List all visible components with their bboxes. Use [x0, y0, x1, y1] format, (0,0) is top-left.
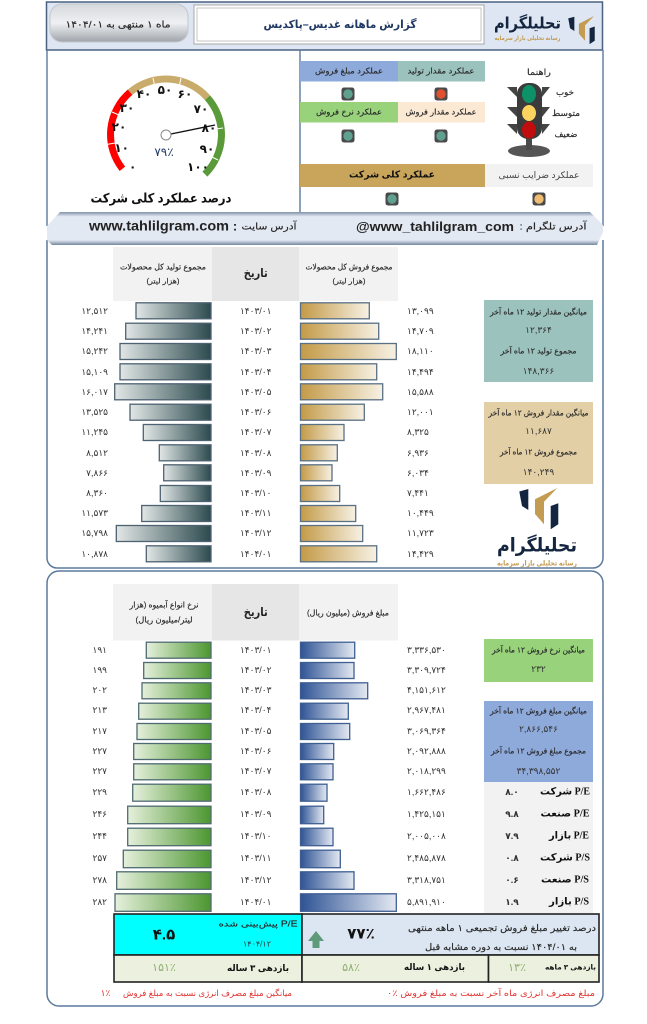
production values: ۱۵,۱۰۹ — [81, 367, 108, 377]
bar chart: total production — [115, 303, 211, 562]
forward P/E cell — [114, 914, 302, 955]
stat box: sales amount averages: ۲,۸۶۶,۵۴۶ — [519, 724, 558, 734]
sales change cell: درصد تغییر مبلغ فروش تجمیعی ۱ ماهه منتهی — [408, 923, 596, 933]
address bar: آدرس سایت — [242, 220, 297, 232]
production values: ۱۲,۵۱۲ — [81, 306, 108, 316]
energy cost value: average: ۱٪ — [101, 988, 110, 998]
production values: ۱۴,۲۴۱ — [81, 326, 108, 336]
valuation ratios table: P/E صنعت — [540, 808, 590, 820]
sales amount values: ۲,۰۹۲,۸۸۸ — [407, 746, 446, 756]
table 2 dates: ۱۴۰۴/۰۱ — [240, 897, 271, 907]
gauge: overall company performance: ۲۰ — [112, 120, 126, 134]
panel: report header — [46, 2, 602, 50]
price values — [92, 645, 107, 907]
indicator: sales price performance: عملکرد نرخ فروش — [316, 108, 382, 116]
logo: Tahlilgram — [497, 488, 577, 568]
production values: ۱۱,۲۴۵ — [81, 427, 108, 437]
three-year return cell: ۱۵۱٪ — [152, 962, 176, 974]
gauge: overall company performance: ۵۰ — [158, 83, 172, 97]
three-year return cell: بازدهی ۳ ساله — [227, 963, 289, 974]
stat box: sales quantity averages: ۱۴۰,۲۴۹ — [523, 467, 554, 477]
stat box: production averages: مجموع تولید ۱۲ ماه آخر — [500, 346, 576, 356]
valuation ratios table: P/S بازار — [548, 896, 589, 908]
stat box: production averages: میانگین مقدار تولید ۱۲ ماه آخر — [489, 306, 587, 316]
price values: ۲۸۲ — [92, 897, 107, 907]
stat box: production averages: ۱۲,۳۶۴ — [525, 325, 552, 335]
production values: ۱۵,۷۹۸ — [81, 528, 108, 538]
sales values: ۱۳,۰۹۹ — [407, 306, 434, 316]
table 2 dates: ۱۴۰۳/۱۲ — [240, 875, 272, 885]
sales values — [407, 306, 434, 559]
panel: sales amount and price — [47, 571, 603, 1006]
indicator: sales quantity performance: عملکرد مقدار فروش — [406, 108, 476, 116]
valuation ratios table — [484, 782, 593, 913]
table 1 dates: ۱۴۰۳/۱۲ — [240, 528, 272, 538]
indicator: relative ratios performance — [485, 164, 593, 206]
gauge: overall company performance: ۴۰ — [137, 87, 151, 101]
table 2 dates: ۱۴۰۳/۰۷ — [240, 766, 272, 776]
table 1 dates: ۱۴۰۳/۰۸ — [240, 448, 272, 458]
forward P/E cell: P/E پیش‌بینی شده — [219, 920, 298, 928]
sales change cell: به ۱۴۰۴/۰۱ نسبت به دوره مشابه قبل — [425, 942, 577, 952]
table 2 dates: ۱۴۰۳/۰۳ — [240, 685, 272, 695]
address bar: www.tahlilgram.com — [88, 218, 229, 234]
stat box: sales quantity averages — [484, 402, 593, 484]
forward P/E cell: ۴.۵ — [153, 926, 175, 944]
sales values: ۶,۹۳۶ — [407, 448, 429, 458]
sales change cell — [302, 914, 599, 955]
sales values: ۱۸,۱۱۰ — [407, 346, 434, 356]
report title: گزارش ماهانه غدیس–پاکدیس — [264, 18, 417, 31]
forward P/E cell: ۱۴۰۴/۱۲ — [243, 940, 271, 948]
sales values: ۱۵,۵۸۸ — [407, 387, 434, 397]
price values: ۲۲۹ — [92, 787, 107, 797]
production values: ۸,۳۶۰ — [86, 488, 108, 498]
header logo: تحلیلگرام — [494, 14, 561, 32]
table 2 dates: ۱۴۰۳/۰۶ — [240, 746, 272, 756]
sales amount values: ۳,۳۱۸,۷۵۱ — [407, 875, 446, 885]
table 1 dates — [240, 306, 272, 559]
stat box: sales quantity averages: ۱۱,۶۸۷ — [525, 426, 552, 436]
address bar: : — [233, 218, 237, 234]
table 1 headers: مجموع تولید کل محصولات — [120, 262, 206, 272]
price values: ۲۴۶ — [92, 809, 107, 819]
legend: traffic light guide: ضعیف — [554, 129, 578, 139]
three-month return cell — [488, 955, 599, 982]
stat box: sales amount averages: میانگین مبلغ فروش ۱۲ ماه آخر — [489, 706, 587, 716]
sales amount values: ۲,۰۰۵,۰۰۸ — [407, 831, 446, 841]
price values: ۱۹۱ — [92, 645, 107, 655]
sales values: ۱۴,۴۲۹ — [407, 549, 434, 559]
table 2 headers: لیتر/میلیون ریال) — [136, 616, 192, 624]
table 1 dates: ۱۴۰۳/۱۱ — [240, 508, 271, 518]
indicator: sales amount performance — [300, 61, 398, 100]
gauge value: ۷۹٪ — [154, 145, 174, 159]
sales amount values: ۱,۶۶۲,۴۸۶ — [407, 787, 446, 797]
table 1 dates: ۱۴۰۴/۰۱ — [240, 549, 271, 559]
valuation ratios table: P/E شرکت — [540, 786, 590, 798]
table 2 dates: ۱۴۰۳/۰۹ — [240, 809, 272, 819]
three-year return cell — [114, 955, 302, 982]
table 1 headers: (هزار لیتر) — [146, 278, 180, 286]
table 2 dates: ۱۴۰۳/۰۴ — [240, 705, 272, 715]
table 1 headers — [113, 247, 398, 301]
valuation ratios table: P/S صنعت — [541, 874, 589, 886]
table 1 dates: ۱۴۰۳/۰۴ — [240, 367, 272, 377]
table 1 dates: ۱۴۰۳/۱۰ — [240, 488, 271, 498]
table 1 dates: ۱۴۰۳/۰۵ — [240, 387, 272, 397]
three-month return cell: بازدهی ۳ ماهه — [545, 964, 596, 972]
table 2 headers — [113, 584, 398, 640]
price values: ۲۷۸ — [92, 875, 107, 885]
production values: ۸,۵۱۲ — [86, 448, 108, 458]
sales values: ۱۱,۷۲۳ — [407, 528, 434, 538]
table 1 dates: ۱۴۰۳/۰۶ — [240, 407, 272, 417]
valuation ratios table: ۸.۰ — [505, 787, 519, 797]
valuation ratios table: ۹.۸ — [505, 809, 519, 819]
gauge: overall company performance: ۱۰۰ — [187, 160, 209, 174]
production values: ۱۰,۸۷۸ — [81, 549, 108, 559]
address bar — [47, 212, 603, 245]
three-month return cell: ۱۳٪ — [508, 962, 526, 974]
sales amount values: ۲,۴۸۵,۸۷۸ — [407, 853, 446, 863]
table 2 dates: ۱۴۰۳/۰۱ — [240, 645, 271, 655]
gauge: overall company performance: ۰ — [129, 160, 136, 174]
table 2 headers: نرخ انواع آبمیوه (هزار — [129, 600, 198, 610]
sales amount values — [407, 645, 446, 907]
energy cost note: average: میانگین مبلغ مصرف انرژی نسبت به مبلغ فروش — [123, 988, 292, 998]
table 1 dates: ۱۴۰۳/۰۷ — [240, 427, 272, 437]
price values: ۱۹۹ — [92, 665, 107, 675]
date pill: ماه ۱ منتهی به ۱۴۰۴/۰۱ — [66, 20, 170, 30]
valuation ratios table: ۰.۸ — [505, 853, 519, 863]
address bar: آدرس تلگرام : — [520, 220, 587, 232]
sales amount values: ۲,۹۶۷,۴۸۱ — [407, 705, 446, 715]
sales amount values: ۳,۳۳۶,۵۳۰ — [407, 645, 446, 655]
indicator: relative ratios performance: عملکرد ضرایب نسبی — [498, 170, 580, 180]
gauge title: درصد عملکرد کلی شرکت — [90, 190, 232, 206]
logo: Tahlilgram: تحلیلگرام — [497, 534, 577, 556]
sales amount values: ۴,۱۵۱,۶۱۲ — [407, 685, 446, 695]
sales values: ۸,۳۲۵ — [407, 427, 429, 437]
table 2 headers: مبلغ فروش (میلیون ریال) — [307, 608, 389, 618]
stat box: sales quantity averages: میانگین مقدار فروش ۱۲ ماه آخر — [488, 408, 588, 418]
one-year return cell — [302, 955, 488, 982]
price values: ۲۱۳ — [92, 705, 107, 715]
stat box: production averages — [484, 300, 593, 382]
icon: up arrow — [308, 931, 324, 948]
price values: ۲۱۷ — [92, 726, 107, 736]
stat box: average sales price: میانگین نرخ فروش ۱۲ ماه آخر — [491, 644, 585, 654]
summary box — [114, 914, 599, 982]
header logo — [494, 14, 595, 44]
gauge: overall company performance: ۷۰ — [194, 102, 208, 116]
report title — [194, 5, 484, 44]
stat box: production averages: ۱۴۸,۳۶۶ — [523, 366, 554, 376]
sales amount values: ۱,۴۲۵,۱۵۱ — [407, 809, 446, 819]
bar chart: total sales — [300, 303, 396, 562]
indicator: sales price performance — [300, 102, 398, 142]
stat box: average sales price: ۲۳۲ — [531, 664, 546, 674]
logo: Tahlilgram: رسانه تحلیلی بازار سرمایه — [497, 558, 577, 568]
table 2 dates — [240, 645, 272, 907]
legend: traffic light guide: متوسط — [552, 108, 580, 118]
gauge: overall company performance: ۹۰ — [200, 142, 214, 156]
gauge needle — [161, 125, 215, 140]
production values: ۱۶,۰۱۷ — [81, 387, 108, 397]
price values: ۲۰۲ — [92, 685, 107, 695]
sales values: ۷,۴۴۱ — [407, 488, 429, 498]
header logo: رسانه تحلیلی بازار سرمایه — [494, 35, 561, 42]
legend: traffic light guide — [507, 67, 580, 157]
sales change cell: ۷۷٪ — [347, 926, 375, 942]
sales amount values: ۳,۳۰۹,۷۲۴ — [407, 665, 446, 675]
stat box: sales quantity averages: مجموع فروش ۱۲ ماه آخر — [499, 446, 577, 456]
table 1 dates: ۱۴۰۳/۰۳ — [240, 346, 272, 356]
valuation ratios table: ۷.۹ — [505, 831, 519, 841]
indicator: sales amount performance: عملکرد مبلغ فروش — [315, 66, 383, 76]
production values: ۱۱,۵۷۳ — [81, 508, 108, 518]
sales amount values: ۳,۰۶۹,۳۶۴ — [407, 726, 446, 736]
valuation ratios table: P/S شرکت — [540, 852, 590, 864]
bar chart: sales price — [115, 642, 211, 911]
production values: ۱۵,۲۴۲ — [81, 346, 108, 356]
table 2 dates: ۱۴۰۳/۰۸ — [240, 787, 272, 797]
panel: production and sales quantity — [47, 240, 603, 568]
table 1 dates: ۱۴۰۳/۰۲ — [240, 326, 272, 336]
gauge: overall company performance: ۱۰ — [114, 141, 129, 155]
indicator: production quantity performance: عملکرد مقدار تولید — [408, 66, 474, 76]
production values — [81, 306, 108, 559]
sales values: ۶,۰۳۴ — [407, 468, 429, 478]
price values: ۲۲۷ — [92, 746, 107, 756]
indicator: sales quantity performance — [398, 102, 485, 142]
table 1 headers: تاریخ — [244, 266, 268, 280]
energy cost note: last month: مبلغ مصرف انرژی ماه آخر نسبت به مبلغ فروش ٪۰ — [387, 987, 595, 998]
stat box: average sales price — [484, 639, 593, 682]
date pill — [50, 4, 188, 42]
gauge: overall company performance: ۳۰ — [120, 101, 134, 115]
sales values: ۱۴,۷۰۹ — [407, 326, 434, 336]
indicator: production quantity performance — [398, 61, 485, 100]
table 2 dates: ۱۴۰۳/۰۲ — [240, 665, 272, 675]
production values: ۷,۸۶۶ — [86, 468, 108, 478]
price values: ۲۲۷ — [92, 766, 107, 776]
table 2 dates: ۱۴۰۳/۰۵ — [240, 726, 272, 736]
table 1 dates: ۱۴۰۳/۰۱ — [240, 306, 271, 316]
icon: traffic light — [507, 83, 550, 157]
valuation ratios table: P/E بازار — [548, 830, 589, 842]
stat box: sales amount averages — [484, 701, 593, 782]
one-year return cell: ۵۸٪ — [342, 962, 360, 974]
price values: ۲۵۷ — [92, 853, 107, 863]
gauge: overall company performance — [106, 78, 223, 174]
bar chart: sales amount — [300, 642, 396, 911]
price values: ۲۴۴ — [92, 831, 107, 841]
sales amount values: ۵,۸۹۱,۹۱۰ — [407, 897, 446, 907]
sales values: ۱۴,۴۹۴ — [407, 367, 434, 377]
sales amount values: ۲,۰۱۸,۲۹۹ — [407, 766, 446, 776]
legend: traffic light guide: راهنما — [527, 67, 551, 77]
table 2 dates: ۱۴۰۳/۱۱ — [240, 853, 271, 863]
table 1 headers: مجموع فروش کل محصولات — [306, 262, 392, 272]
indicator: overall company performance: عملکرد کلی شرکت — [349, 170, 435, 180]
panel: performance overview frame — [47, 50, 603, 226]
legend: traffic light guide: خوب — [556, 87, 574, 97]
production values: ۱۳,۵۲۵ — [81, 407, 108, 417]
table 1 headers: (هزار لیتر) — [332, 278, 366, 286]
valuation ratios table: ۰.۶ — [505, 875, 519, 885]
stat box: sales amount averages: ۳۴,۳۹۸,۵۵۲ — [517, 766, 560, 776]
address bar: @www_tahlilgram_com — [356, 220, 514, 234]
sales values: ۱۰,۴۴۹ — [407, 508, 434, 518]
sales values: ۱۲,۰۰۱ — [407, 407, 434, 417]
valuation ratios table: ۱.۹ — [505, 897, 519, 907]
stat box: sales amount averages: مجموع مبلغ فروش ۱۲ ماه آخر — [490, 746, 586, 756]
gauge: overall company performance: ۸۰ — [202, 121, 216, 135]
table 1 dates: ۱۴۰۳/۰۹ — [240, 468, 272, 478]
indicator: overall company performance — [300, 164, 485, 206]
one-year return cell: بازدهی ۱ ساله — [404, 962, 465, 973]
gauge: overall company performance: ۶۰ — [178, 87, 192, 101]
table 2 headers: تاریخ — [244, 605, 268, 619]
table 2 dates: ۱۴۰۳/۱۰ — [240, 831, 271, 841]
